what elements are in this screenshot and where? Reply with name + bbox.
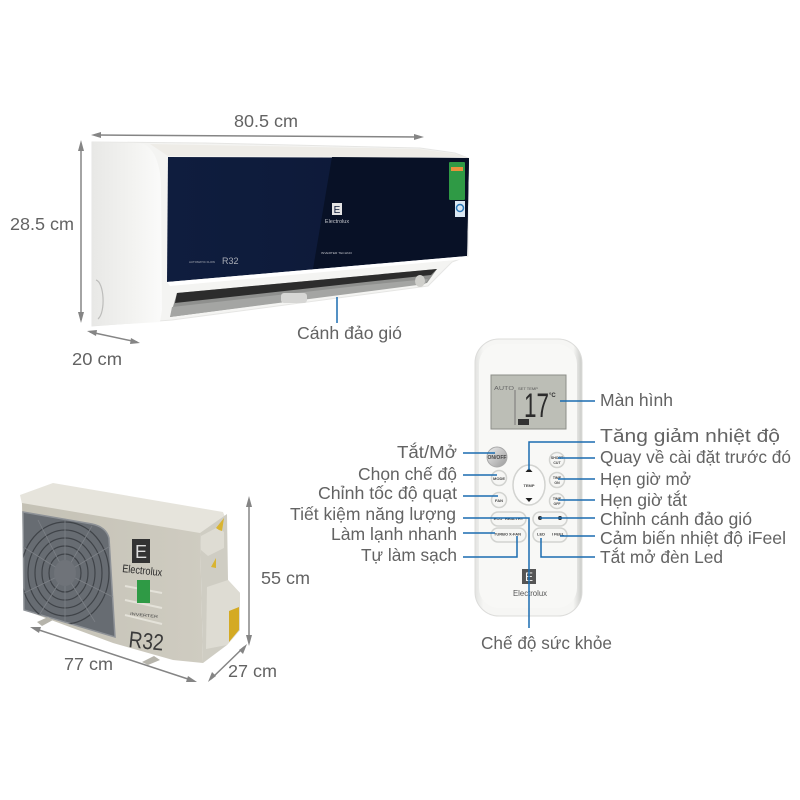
right arrowhead [186,676,197,682]
width label: 80.5 cm [234,111,298,131]
LCD mode text: AUTO [494,386,515,392]
MODE button [492,470,506,486]
indoor unit body [92,142,468,326]
dimension: indoor height [10,140,84,323]
callout: eco: Tiết kiệm năng lượng [290,504,456,524]
width line [33,628,194,681]
LED / iFEEL key [533,528,567,542]
LED / iFEEL key: I FEEL [552,532,565,536]
SHORTCUT button: SHORT [551,456,564,460]
warning triangle top [216,518,224,531]
ECO / HEALTHY key: ECO [494,516,502,521]
height label: 55 cm [261,568,310,588]
right foot [142,656,160,665]
flap label: Cánh đảo gió [297,323,402,343]
LCD bar [518,419,529,425]
top cover [20,483,227,534]
callout: mode: Chọn chế độ [358,464,457,484]
front face [22,503,203,663]
LCD set temp text: SET TEMP [518,386,538,391]
MODE button: MODE [493,476,505,481]
logo box [132,539,150,563]
right hinge [415,275,425,287]
SHORTCUT button: CUT [553,461,561,465]
TIME ON button [550,472,564,488]
bottom arrowhead [246,635,252,646]
callout: timer on: Hẹn giờ mở [600,469,691,489]
lower arrowhead [208,672,216,682]
Electrolux name: Electrolux [325,219,349,225]
width line [95,135,420,137]
white lip [167,256,467,286]
Electrolux logo [332,203,342,215]
energy label [449,162,465,200]
air outlet slot [170,269,437,317]
fan grille housing [23,512,115,637]
flap hinge [281,293,307,303]
callout: fan speed: Chỉnh tốc độ quạt [318,483,457,503]
top vents [150,144,466,157]
Q mark [456,204,464,212]
R32 mark: R32 [222,256,239,266]
dimension: indoor depth [72,330,140,369]
SHORTCUT button [550,452,564,468]
valve cover [206,580,240,649]
remote brand: Electrolux [513,589,547,598]
indoor unit [92,142,469,326]
Electrolux logo mark: E [334,205,341,216]
inverter logo: INVERTER [130,611,158,619]
TURBO / X-FAN key: TURBO [494,532,508,536]
yellow warning [229,607,239,642]
remote callouts: right [529,390,791,567]
upper arrowhead [239,644,247,654]
depth label: 27 cm [228,661,277,681]
Q badge [455,201,465,217]
dark outlet gap [175,269,437,303]
callout: wind flap [297,297,402,343]
callout: healthy mode [481,518,612,653]
LCD divider [514,390,516,425]
LCD temperature: 17 [524,387,549,425]
top arrowhead [78,140,84,151]
dimension: outdoor depth [208,644,277,682]
callout: iFeel: Cảm biến nhiệt độ iFeel [600,528,786,548]
callout: temperature [529,425,780,470]
callout: timer off [558,489,687,510]
side face [200,514,240,663]
left foot [37,617,53,626]
TEMP rocker [513,465,545,505]
outdoor unit [20,483,240,665]
wind flap [170,279,428,317]
left end cap [92,142,162,326]
remote body [475,339,582,616]
callout: LED: Tắt mở đèn Led [600,546,723,567]
side knob [96,280,103,319]
TIME OFF button: TIME [553,497,562,501]
warning triangle lower [211,558,216,568]
healthy leader [498,518,529,628]
TIME OFF button: OFF [554,502,561,506]
callout: self clean [361,536,517,565]
LCD screen [491,375,566,429]
callout: swing: Chỉnh cánh đảo gió [600,509,752,529]
callout: shortcut: Quay về cài đặt trước đó [600,447,791,467]
front arrowhead [130,338,140,344]
height label: 28.5 cm [10,214,74,234]
ON/OFF button [487,447,507,467]
LCD degree: °C [549,393,556,399]
remote face [479,344,577,608]
TIME ON button: ON [554,481,560,485]
depth line [211,647,244,679]
ECO / HEALTHY key [491,512,526,526]
TURBO / X-FAN key [491,528,526,542]
energy label [137,580,150,603]
dimension: indoor width [91,111,424,140]
callout: power: Tắt/Mở [397,441,457,462]
swing key [533,512,567,526]
height line [248,500,250,642]
outdoor brand: Electrolux [122,563,163,579]
navy front panel [167,157,469,282]
left arrowhead [30,627,41,633]
TIME OFF button [550,494,564,508]
callout: screen: Màn hình [600,390,673,410]
front ribs [125,586,162,624]
height line [80,144,82,320]
ECO / HEALTHY key: HEALTHY [505,516,524,521]
FAN button: FAN [495,498,503,503]
bottom arrowhead [78,312,84,323]
inverter mark: INVERTER TECHNO [321,251,353,255]
FAN button [492,492,506,508]
back arrowhead [87,330,97,336]
fan grille rings [23,520,112,624]
callout: turbo: Làm lạnh nhanh [331,524,457,544]
flap leader [336,297,338,323]
right arrowhead [414,134,424,140]
callout: power [397,441,495,462]
dimension: outdoor width [30,627,197,682]
callout: temperature: Tăng giảm nhiệt độ [600,425,780,446]
TURBO / X-FAN key: X-FAN [509,532,521,536]
LED / iFEEL key: LED [537,532,545,536]
callout: timer on [558,469,691,489]
depth line [90,332,137,342]
fan hub [54,560,76,586]
remote logo: E [525,570,533,584]
top arrowhead [246,496,252,507]
width label: 77 cm [64,654,113,674]
callout: timer off: Hẹn giờ tắt [600,489,687,510]
left arrowhead [91,132,101,138]
energy stars [451,167,463,171]
remote logo [522,569,536,584]
dimension: outdoor height [246,496,310,646]
feature mark: AUTOMATIC FLOW [189,260,215,264]
healthy label: Chế độ sức khỏe [481,633,612,653]
callout: self clean: Tự làm sạch [361,545,457,565]
TIME ON button: TIME [553,476,562,480]
callout: screen [560,390,673,410]
service handle [201,527,224,556]
remote control [475,339,582,616]
logo box: E [135,542,147,562]
callout: LED [541,538,723,567]
ON/OFF button: ON/OFF [488,455,506,461]
R32 mark: R32 [127,626,165,656]
panel reflection [313,157,469,269]
depth label: 20 cm [72,349,122,369]
TEMP rocker: TEMP [523,483,535,488]
remote callouts: left [290,441,517,565]
